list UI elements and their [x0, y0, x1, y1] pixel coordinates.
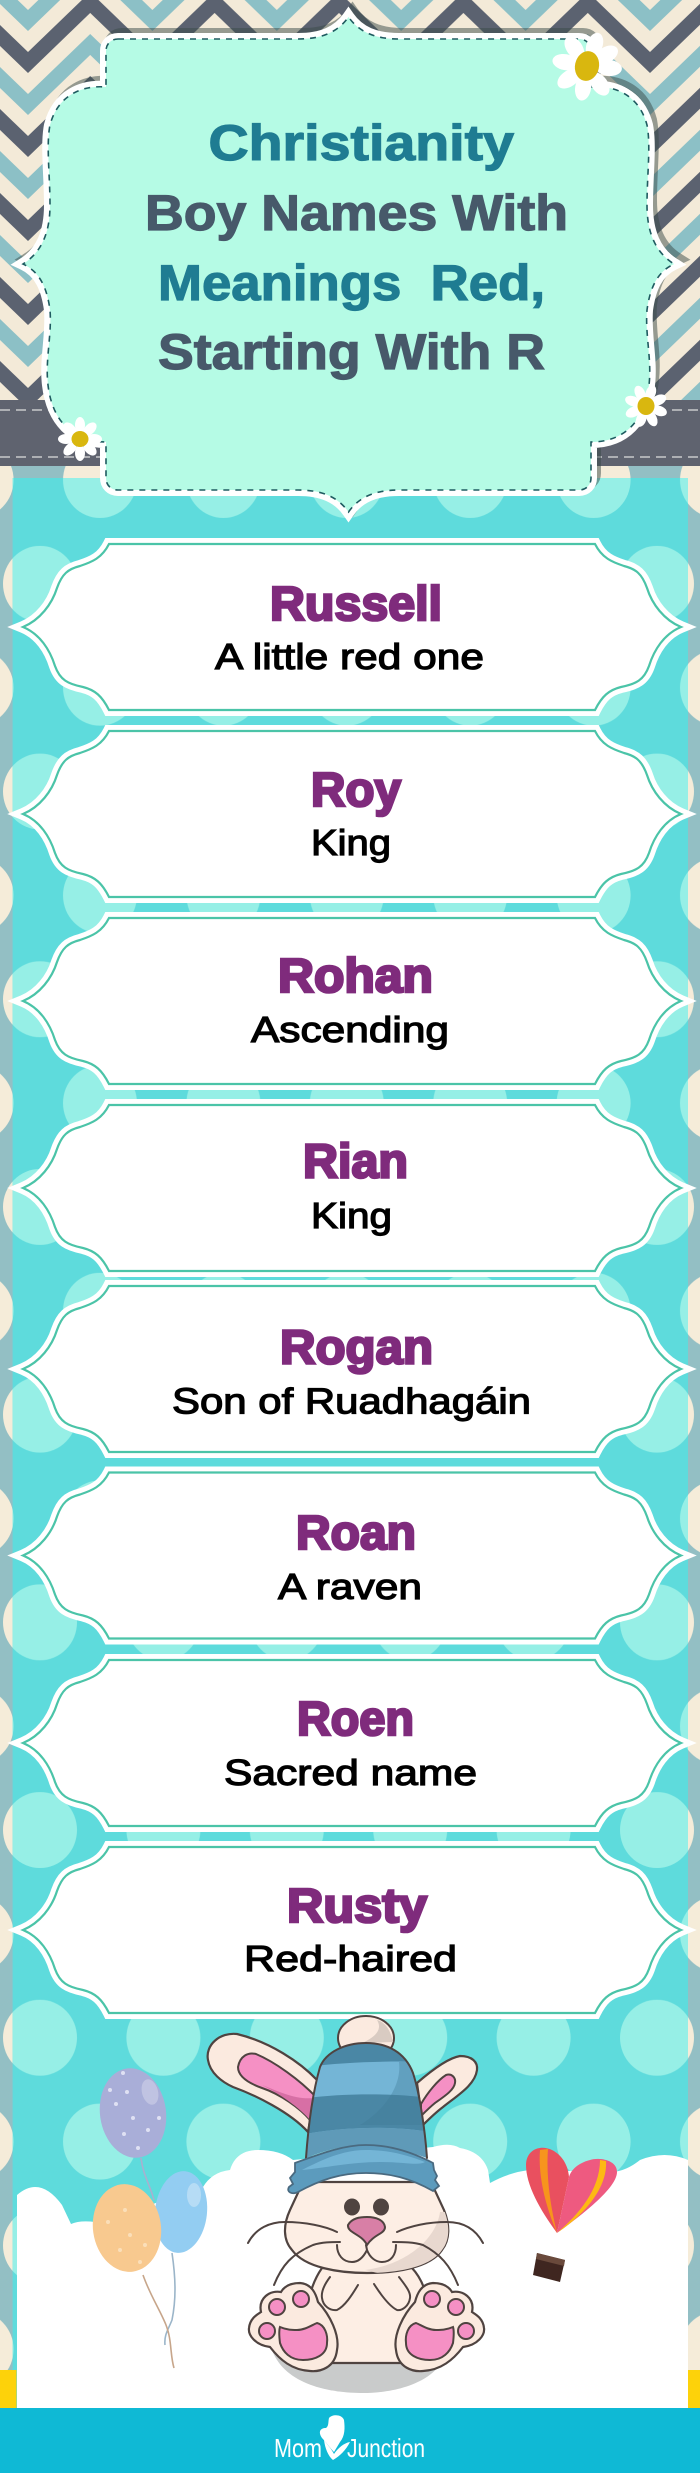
icon: heart hot air balloon [526, 2148, 617, 2282]
ground shadow [272, 2350, 447, 2393]
arms [322, 2277, 410, 2310]
icon: daisy bottom right [624, 384, 668, 428]
panel: Russell: Russell [270, 578, 442, 631]
white clouds [17, 2145, 688, 2408]
panel: Rian: Rian [303, 1136, 408, 1188]
panel: Rogan: Rogan [280, 1322, 433, 1374]
icon: bunny with striped hat [208, 2016, 484, 2393]
icon: daisy top right [551, 30, 623, 102]
panel: Roan [23, 1472, 681, 1638]
panel: Rohan: Ascending [251, 1009, 449, 1050]
panel: Roen [23, 1660, 681, 1826]
body [306, 2268, 430, 2363]
title [145, 115, 568, 380]
panel: Rian: King [311, 1195, 392, 1236]
hat [288, 2040, 439, 2193]
panel: Russell [23, 544, 681, 710]
logo: MomJunction: Junction [347, 2433, 425, 2463]
panel: Rusty: Red-haired [244, 1938, 457, 1979]
panel: Roy: King [311, 822, 391, 863]
head [285, 2182, 452, 2276]
title: Meanings Red, [158, 255, 545, 311]
right foot [395, 2283, 484, 2371]
dark stitched band [0, 400, 700, 466]
background: polka dot panel [0, 466, 700, 2408]
icon: balloons [87, 2064, 211, 2368]
panel: Russell: A little red one [215, 636, 484, 677]
yellow corner strips [0, 2370, 700, 2408]
panel: Rogan: Son of Ruadhagáin [172, 1380, 531, 1422]
face [248, 2198, 483, 2285]
title: Christianity [208, 115, 514, 171]
panel: Roy: Roy [311, 764, 401, 817]
background: chevron pattern [0, 0, 700, 400]
panel: Roy [23, 731, 681, 897]
panel: Roen: Sacred name [224, 1752, 477, 1793]
panel: Roan: A raven [278, 1566, 422, 1607]
logo: MomJunction [274, 2415, 425, 2463]
panel: title plaque [23, 12, 678, 512]
footer bar [0, 2408, 700, 2473]
panel: Roan: Roan [296, 1507, 416, 1560]
panel: Rusty [23, 1847, 681, 2013]
title: Boy Names With [145, 185, 568, 241]
panel: Rogan [23, 1286, 681, 1452]
panel: Rohan [23, 918, 681, 1084]
logo: MomJunction: Mom [274, 2433, 322, 2463]
panel: Rohan: Rohan [278, 950, 433, 1003]
pompom [338, 2016, 394, 2060]
panel: Rian [23, 1105, 681, 1271]
title: Starting With R [158, 324, 545, 380]
panel: Roen: Roen [297, 1693, 414, 1746]
left ear [208, 2034, 317, 2132]
icon: daisy bottom left [58, 417, 102, 461]
right ear [417, 2056, 477, 2125]
left foot [249, 2283, 338, 2371]
panel: Rusty: Rusty [287, 1880, 427, 1933]
